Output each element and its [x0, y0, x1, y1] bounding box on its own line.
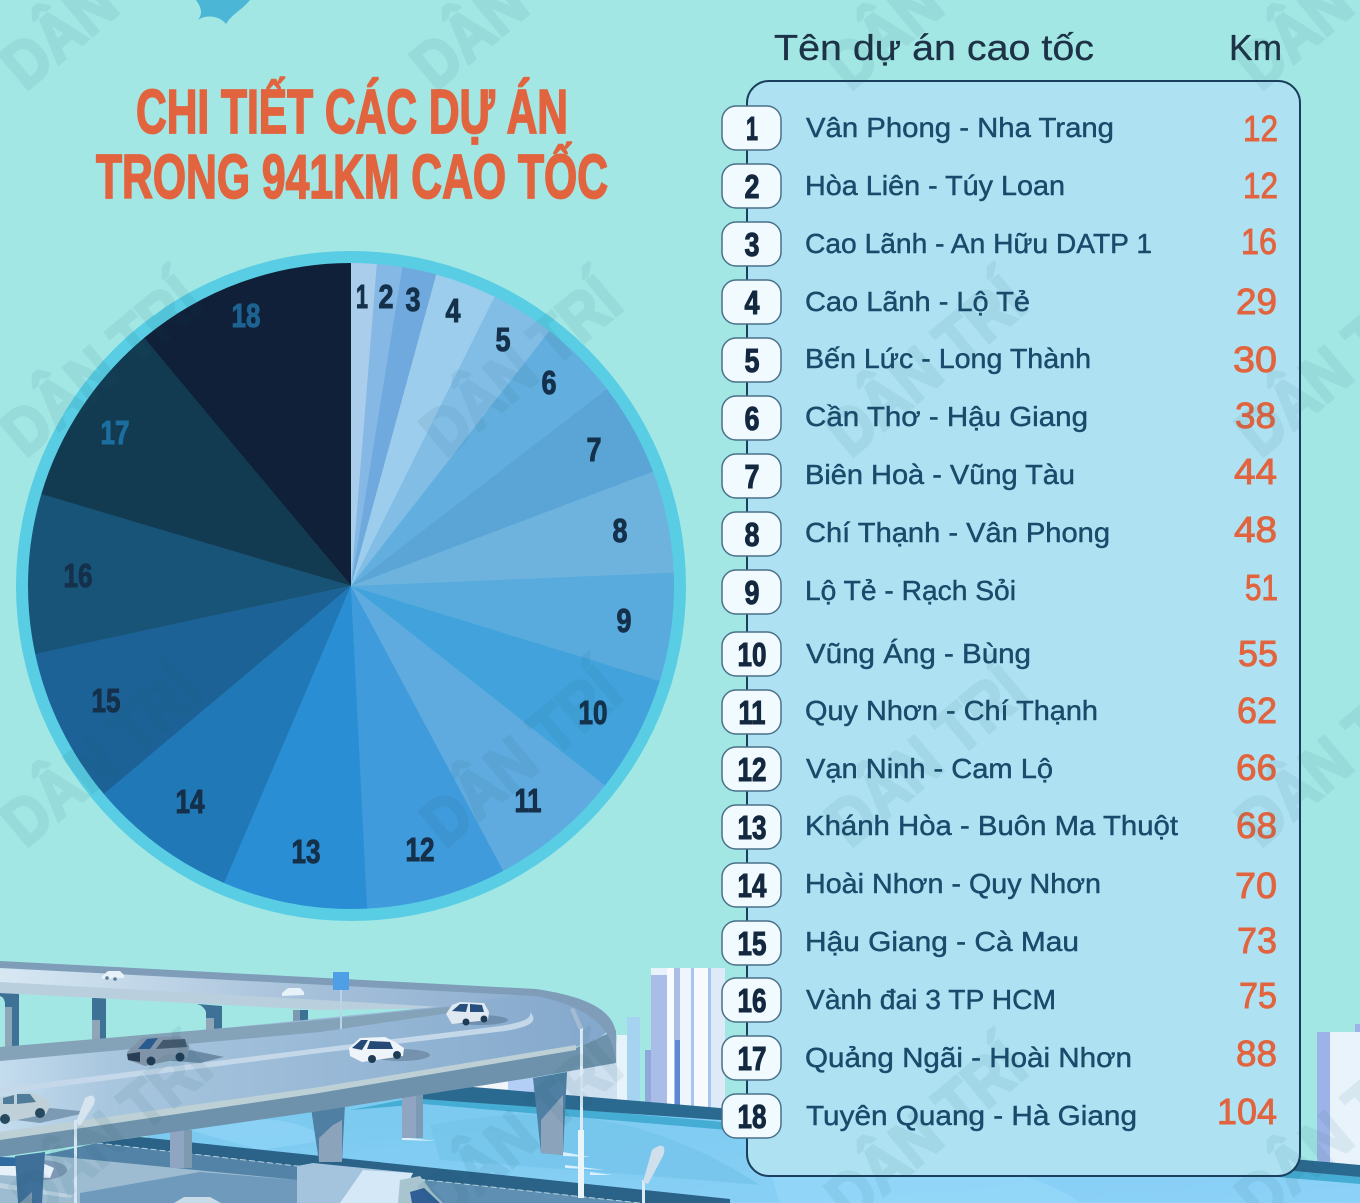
pie slice numbers: 10 [578, 694, 608, 731]
title [96, 78, 608, 212]
near lane: side band [43, 1143, 297, 1180]
overpass main deck [0, 992, 608, 1134]
row 10: 10 [738, 636, 766, 673]
row 18: Tuyên Quang - Hà Giang [806, 1100, 1137, 1131]
pie slice numbers: 3 [406, 281, 420, 318]
row 3: 16 [1241, 221, 1277, 262]
water reflections [402, 1137, 612, 1175]
row 5: 5 [744, 342, 760, 379]
pie slice numbers [64, 278, 632, 870]
small far car 1 [102, 971, 124, 981]
small far car 2 [282, 988, 304, 996]
row 9 [722, 567, 1278, 614]
near river bank [97, 1137, 730, 1203]
row 9: Lộ Tẻ - Rạch Sỏi [805, 575, 1016, 606]
row 3: 3 [744, 226, 760, 263]
lower pillars [15, 1072, 567, 1203]
pie chart [16, 251, 686, 921]
pie slice numbers: 12 [406, 831, 434, 868]
row 5: 30 [1233, 339, 1277, 380]
row 1: Vân Phong - Nha Trang [806, 112, 1114, 143]
row 11: 62 [1237, 690, 1277, 731]
row 15: 73 [1237, 920, 1277, 961]
row 6: 38 [1235, 395, 1276, 436]
truck [297, 1163, 443, 1203]
row 2: 2 [744, 168, 760, 205]
row 14: Hoài Nhơn - Quy Nhơn [805, 868, 1101, 899]
row 6: 6 [744, 400, 760, 437]
row 1 [722, 106, 1278, 150]
top rim [0, 961, 616, 1060]
row 14: 14 [738, 867, 767, 904]
pie slice numbers: 17 [100, 414, 130, 451]
row 17: 88 [1236, 1033, 1277, 1074]
pie slice numbers: 8 [612, 512, 628, 549]
illustration: city, river and overpass [0, 961, 1360, 1203]
row 11: 11 [738, 694, 766, 731]
row 1: 1 [746, 110, 758, 147]
watermark: DÂN TRÍ [407, 651, 636, 860]
buildings left of panel [473, 968, 725, 1109]
pie slice numbers: 13 [292, 833, 320, 870]
white SUV [349, 1037, 430, 1063]
row 4: Cao Lãnh - Lộ Tẻ [805, 286, 1030, 317]
row 10: 55 [1238, 633, 1278, 674]
row 6: Cần Thơ - Hậu Giang [805, 401, 1088, 432]
pie slice numbers: 2 [378, 278, 394, 315]
row 16: Vành đai 3 TP HCM [806, 984, 1056, 1015]
row 3 [722, 221, 1277, 266]
row 14: 70 [1235, 865, 1277, 906]
road edge stripe [0, 1045, 576, 1140]
row 13: 13 [738, 809, 766, 846]
row 4: 4 [744, 284, 760, 321]
row 13 [722, 805, 1277, 849]
row 1: 12 [1243, 108, 1278, 149]
river [140, 1093, 1360, 1203]
street lamps [74, 1008, 664, 1203]
row 4 [722, 280, 1277, 324]
row 18: 18 [738, 1098, 766, 1135]
sign [333, 972, 349, 1029]
upper pillars [0, 993, 308, 1049]
pie slice numbers: 1 [356, 278, 368, 315]
row 15: 15 [738, 925, 766, 962]
row 2: Hòa Liên - Túy Loan [805, 170, 1065, 201]
pie slice numbers: 4 [446, 292, 461, 329]
pie slice numbers: 6 [542, 364, 556, 401]
row 17: 17 [738, 1040, 766, 1077]
cars [0, 971, 508, 1203]
row 9: 9 [744, 574, 760, 611]
row 11 [722, 690, 1277, 734]
row 14 [722, 863, 1277, 907]
car bottom [174, 1197, 221, 1203]
row 6 [722, 395, 1276, 440]
lane line [0, 1012, 533, 1094]
row 18 [722, 1091, 1277, 1138]
row 7 [722, 451, 1277, 498]
pie slice numbers: 18 [232, 297, 260, 334]
row 2 [722, 164, 1278, 208]
row 13: 68 [1236, 805, 1277, 846]
upper ramp deck [0, 968, 536, 1012]
decorative splash at top [196, 0, 250, 24]
pie slice numbers: 9 [616, 602, 632, 639]
row 4: 29 [1236, 281, 1277, 322]
row 10: Vũng Áng - Bùng [806, 638, 1031, 669]
row 16: 16 [738, 982, 766, 1019]
title: CHI TIẾT CÁC DỰ ÁN [136, 78, 568, 147]
row 7: Biên Hoà - Vũng Tàu [805, 459, 1075, 490]
list panel [747, 81, 1300, 1176]
pie slice numbers: 7 [586, 431, 602, 468]
row 18: 104 [1217, 1091, 1277, 1132]
far river bank [380, 1087, 1360, 1177]
row 8: Chí Thạnh - Vân Phong [805, 517, 1110, 548]
watermark: DÂN TRÍ [812, 651, 1041, 860]
pie slice numbers: 5 [496, 321, 510, 358]
row 5 [722, 338, 1277, 382]
row 16: 75 [1239, 975, 1277, 1016]
row 17 [722, 1033, 1277, 1080]
row 12: Vạn Ninh - Cam Lộ [806, 753, 1053, 784]
pie slice numbers: 14 [176, 783, 205, 820]
pie slice numbers: 15 [92, 682, 120, 719]
car under overpass [0, 1157, 67, 1180]
row 5: Bến Lức - Long Thành [805, 343, 1091, 374]
row 13: Khánh Hòa - Buôn Ma Thuột [805, 810, 1178, 841]
row 9: 51 [1245, 567, 1278, 608]
row 12 [722, 747, 1277, 791]
row 11: Quy Nhơn - Chí Thạnh [805, 695, 1098, 726]
row 16 [722, 975, 1277, 1022]
row 8 [722, 509, 1277, 556]
row 10 [722, 632, 1278, 676]
white car far lane [446, 1002, 508, 1026]
row 12: 12 [738, 751, 766, 788]
building right of panel [1317, 1024, 1360, 1167]
pie slice numbers: 16 [64, 557, 92, 594]
row 15: Hậu Giang - Cà Mau [805, 926, 1079, 957]
row 15 [722, 920, 1277, 965]
row 8: 8 [744, 516, 760, 553]
near lane: lower road surface [0, 1155, 297, 1203]
title: TRONG 941KM CAO TỐC [96, 143, 608, 212]
watermark: DÂN TRÍ [812, 261, 1041, 470]
watermark: DÂN TRÍ [407, 261, 636, 470]
row 17: Quảng Ngãi - Hoài Nhơn [805, 1042, 1132, 1073]
silver car left [0, 1092, 90, 1124]
row 3: Cao Lãnh - An Hữu DATP 1 [805, 228, 1152, 259]
inner barrier [0, 1007, 470, 1061]
row 8: 48 [1234, 509, 1277, 550]
pie slice numbers: 11 [514, 782, 542, 819]
column header: project name: Tên dự án cao tốc [774, 27, 1094, 68]
row 7: 7 [744, 458, 760, 495]
column header: km: Km [1229, 27, 1282, 68]
row 2: 12 [1243, 165, 1278, 206]
overpass side wall [0, 1030, 616, 1157]
row 12: 66 [1236, 747, 1277, 788]
grey van [127, 1036, 224, 1066]
row 7: 44 [1234, 451, 1277, 492]
